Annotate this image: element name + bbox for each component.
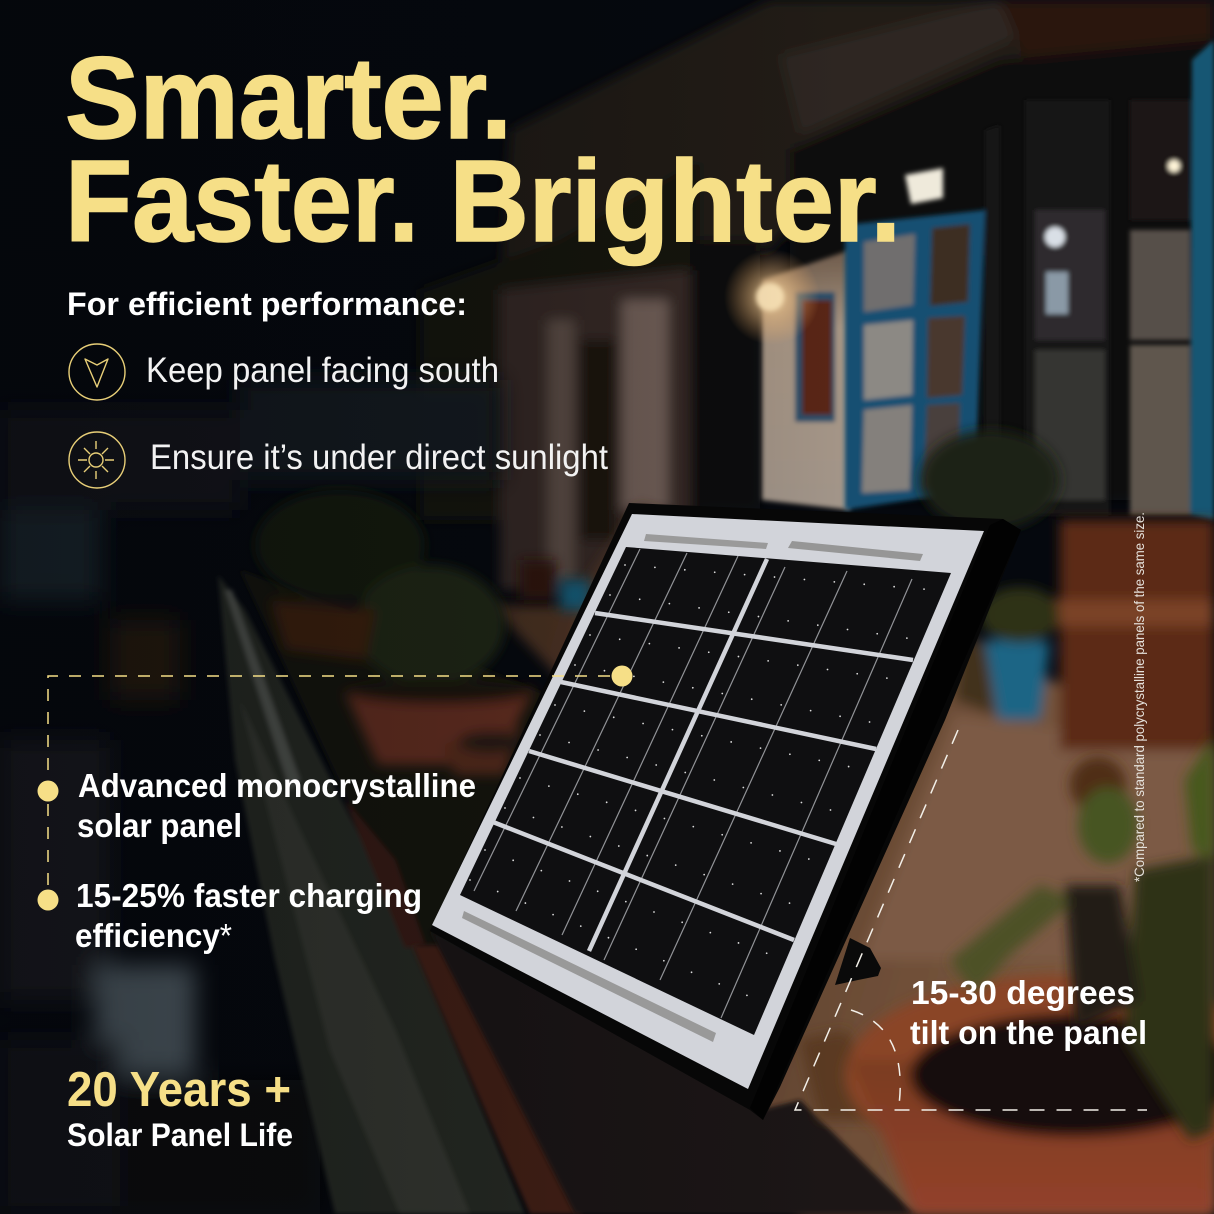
cell busbars — [474, 549, 912, 1018]
feature text: charging efficiency: 15-25% faster charging — [76, 877, 422, 914]
icon: compass arrow — [69, 344, 125, 400]
busbar strips — [644, 534, 768, 549]
icon: sun — [69, 432, 125, 488]
tilt text: 15-30 degrees — [911, 974, 1135, 1011]
plants and pots on the ledge — [255, 490, 590, 775]
callout connector: panel features — [38, 666, 632, 910]
cell gaps — [493, 559, 913, 951]
lit wall and lamp — [762, 250, 850, 510]
floor and bench — [490, 430, 1214, 1214]
panel stand bracket — [835, 938, 881, 985]
feature text: charging efficiency: efficiency* — [75, 917, 232, 954]
feature text: monocrystalline — [77, 767, 476, 844]
tilt text: tilt on the panel — [910, 1014, 1147, 1051]
stone ledge — [218, 570, 560, 1214]
feature text: monocrystalline: solar panel — [77, 807, 242, 844]
panel white backing — [432, 514, 984, 1089]
tip: panel facing south: Keep panel facing south — [146, 351, 499, 390]
stat: panel life — [67, 1063, 293, 1153]
blue window — [845, 125, 1000, 510]
tip: direct sunlight: Ensure it’s under direct sunlight — [150, 438, 608, 477]
title — [65, 33, 901, 266]
title: Smarter. — [65, 33, 512, 163]
subheading: For efficient performance: — [67, 286, 467, 322]
solar cells — [460, 547, 951, 1035]
panel frame — [430, 503, 1021, 1120]
title: Faster. Brighter. — [65, 136, 901, 266]
tilt text — [910, 974, 1147, 1051]
feature text: monocrystalline: Advanced monocrystalline — [78, 767, 476, 804]
bottom right pot and plant — [845, 975, 1214, 1214]
stat: panel life: Solar Panel Life — [67, 1117, 293, 1153]
footnote: *Compared to standard polycrystalline panels of the same size. — [1131, 512, 1147, 882]
tilt angle diagram — [795, 730, 1147, 1110]
stat: panel life: 20 Years + — [67, 1063, 291, 1117]
feature text: charging efficiency — [75, 877, 422, 954]
right windows — [1025, 40, 1214, 520]
left dim background — [0, 380, 500, 1214]
solar panel — [430, 503, 1021, 1120]
icon: wall light fixture — [905, 168, 943, 204]
cell contact dots — [470, 565, 935, 1005]
